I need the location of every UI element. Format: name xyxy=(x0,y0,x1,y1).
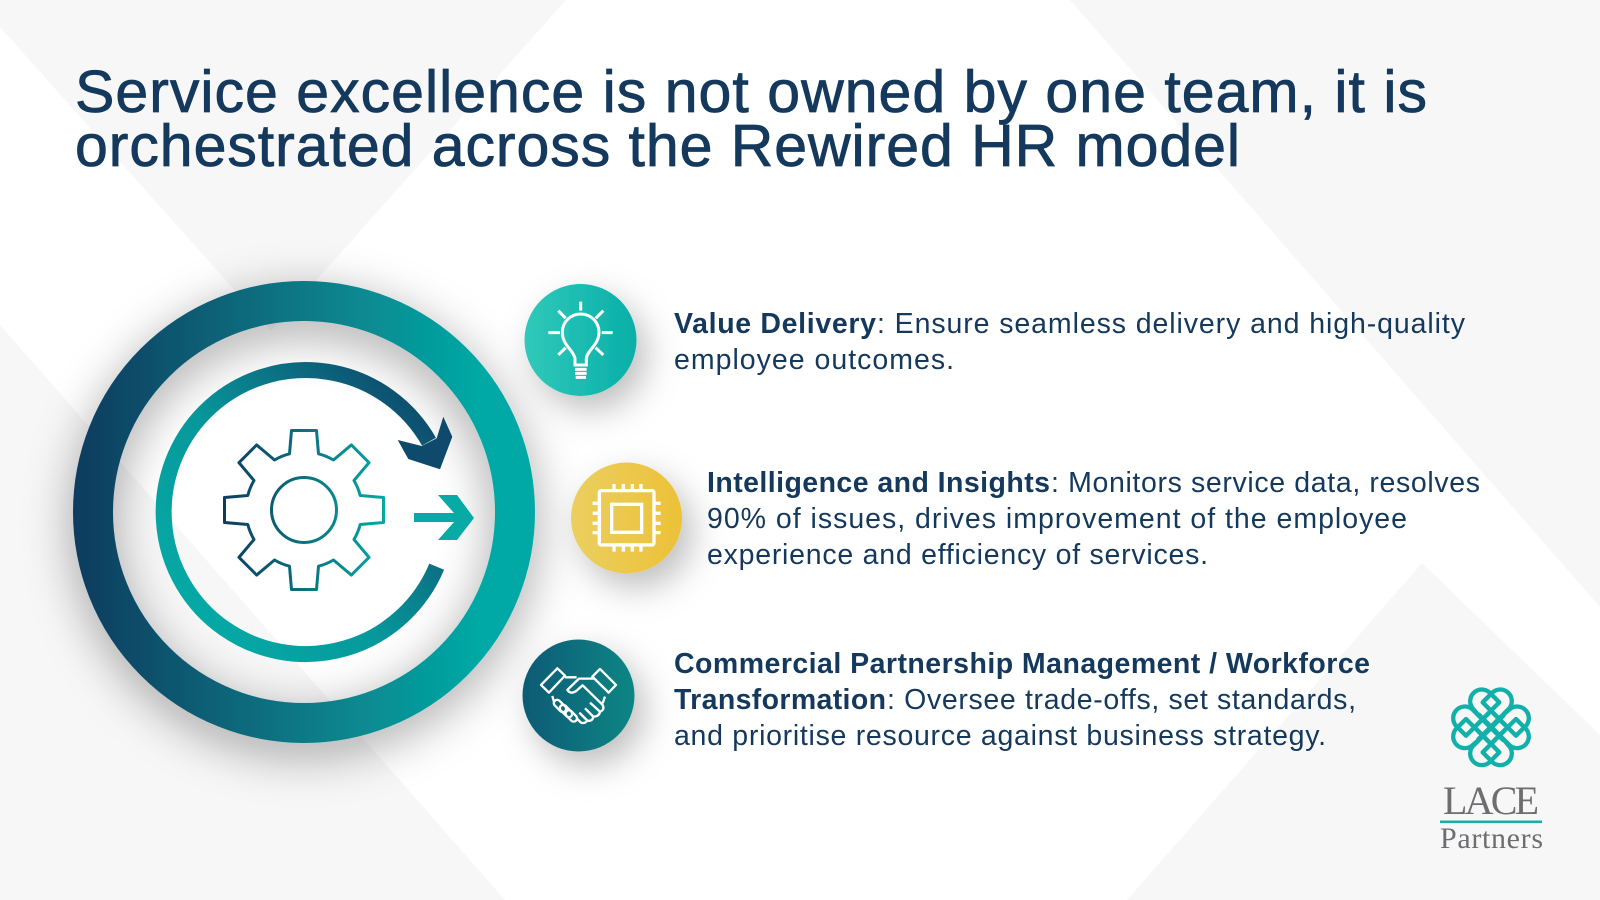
text: commercial partnership management: Commercial Partnership Management / Workforce xyxy=(674,648,1370,680)
text: commercial partnership management xyxy=(674,648,1370,752)
icon: microchip xyxy=(571,462,682,574)
title xyxy=(75,59,1427,179)
logo wordmark: LACE xyxy=(1443,778,1539,823)
logo: LACE Partners: Partners xyxy=(1440,822,1543,855)
text: value delivery xyxy=(674,308,1466,376)
inner circular arrow xyxy=(164,370,452,654)
text: commercial partnership management: Transformation xyxy=(674,684,886,716)
icon: light bulb xyxy=(524,284,636,396)
text: value delivery: Value Delivery xyxy=(674,308,876,340)
teal arrow xyxy=(414,495,474,540)
logo knot xyxy=(1453,690,1529,765)
title: Service excellence is not owned by one team, it is xyxy=(75,59,1427,125)
text: value delivery: employee outcomes. xyxy=(674,344,954,376)
text: intelligence and insights: Intelligence and Insights xyxy=(707,467,1050,499)
title: orchestrated across the Rewired HR model xyxy=(75,113,1240,179)
outer ring xyxy=(93,301,515,723)
text: commercial partnership management: : Oversee trade-offs, set standards, xyxy=(887,684,1356,716)
logo: LACE Partners xyxy=(1440,690,1543,855)
circular diagram xyxy=(93,301,515,723)
text: intelligence and insights xyxy=(707,467,1480,571)
text: intelligence and insights: : Monitors service data, resolves xyxy=(1051,467,1480,499)
text: commercial partnership management: and prioritise resource against business strategy. xyxy=(674,720,1326,752)
text: value delivery: : Ensure seamless delivery and high-quality xyxy=(877,308,1466,340)
icon: handshake xyxy=(522,640,634,752)
gear icon xyxy=(224,430,384,590)
text: intelligence and insights: 90% of issues, drives improvement of the employee xyxy=(707,503,1407,535)
text: intelligence and insights: experience and efficiency of services. xyxy=(707,539,1208,571)
